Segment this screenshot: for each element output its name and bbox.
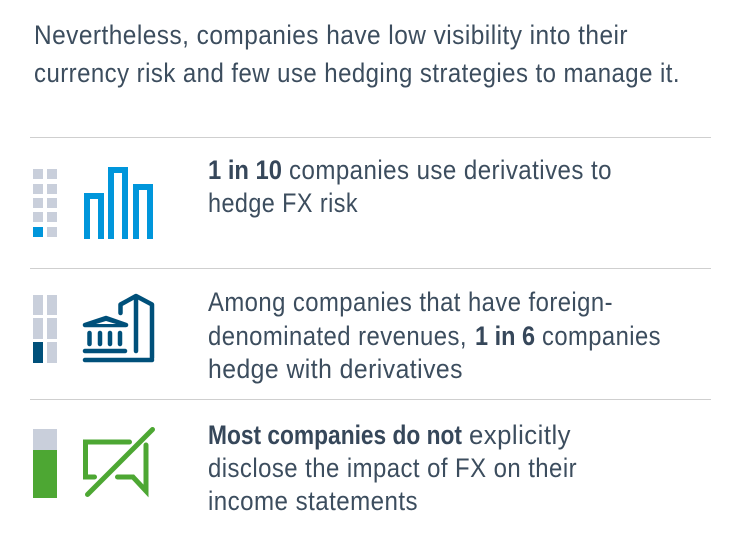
text: 1 in 10: hedge FX risk — [208, 188, 358, 218]
text: 1 in 6: 1 in 6 — [475, 321, 535, 351]
text: 1 in 6: Among companies that have foreign- — [208, 287, 613, 317]
text: most companies — [208, 420, 577, 516]
text: most companies: Most companies do not — [208, 420, 462, 450]
text: 1 in 10 — [208, 155, 612, 218]
text: most companies: explicitly — [469, 420, 571, 450]
panel: foreign-denominated revenues — [33, 287, 661, 384]
text: 1 in 6 — [208, 287, 661, 384]
icon: bar chart — [87, 170, 150, 239]
panel: FX disclosure — [33, 420, 577, 516]
icon: majority stacked bar — [33, 429, 57, 498]
heading text: Nevertheless, companies have low visibility into their — [34, 20, 628, 50]
icon: 1 in 10 waffle grid — [33, 169, 57, 237]
heading text — [34, 20, 680, 88]
icon: 1 in 6 waffle grid — [33, 295, 57, 363]
icon: bank and tower — [85, 296, 152, 360]
text: most companies: income statements — [208, 486, 418, 516]
text: 1 in 10: companies use derivatives to — [289, 155, 612, 185]
text: 1 in 6: companies — [542, 321, 661, 351]
text: most companies: disclose the impact of FX on their — [208, 453, 577, 483]
text: 1 in 10: 1 in 10 — [208, 155, 282, 185]
icon: crossed-out speech bubble — [86, 430, 152, 494]
text: 1 in 6: denominated revenues, — [208, 321, 467, 351]
text: 1 in 6: hedge with derivatives — [208, 354, 463, 384]
panel: derivatives use — [33, 155, 612, 239]
heading text: currency risk and few use hedging strategies to manage it. — [34, 58, 680, 88]
